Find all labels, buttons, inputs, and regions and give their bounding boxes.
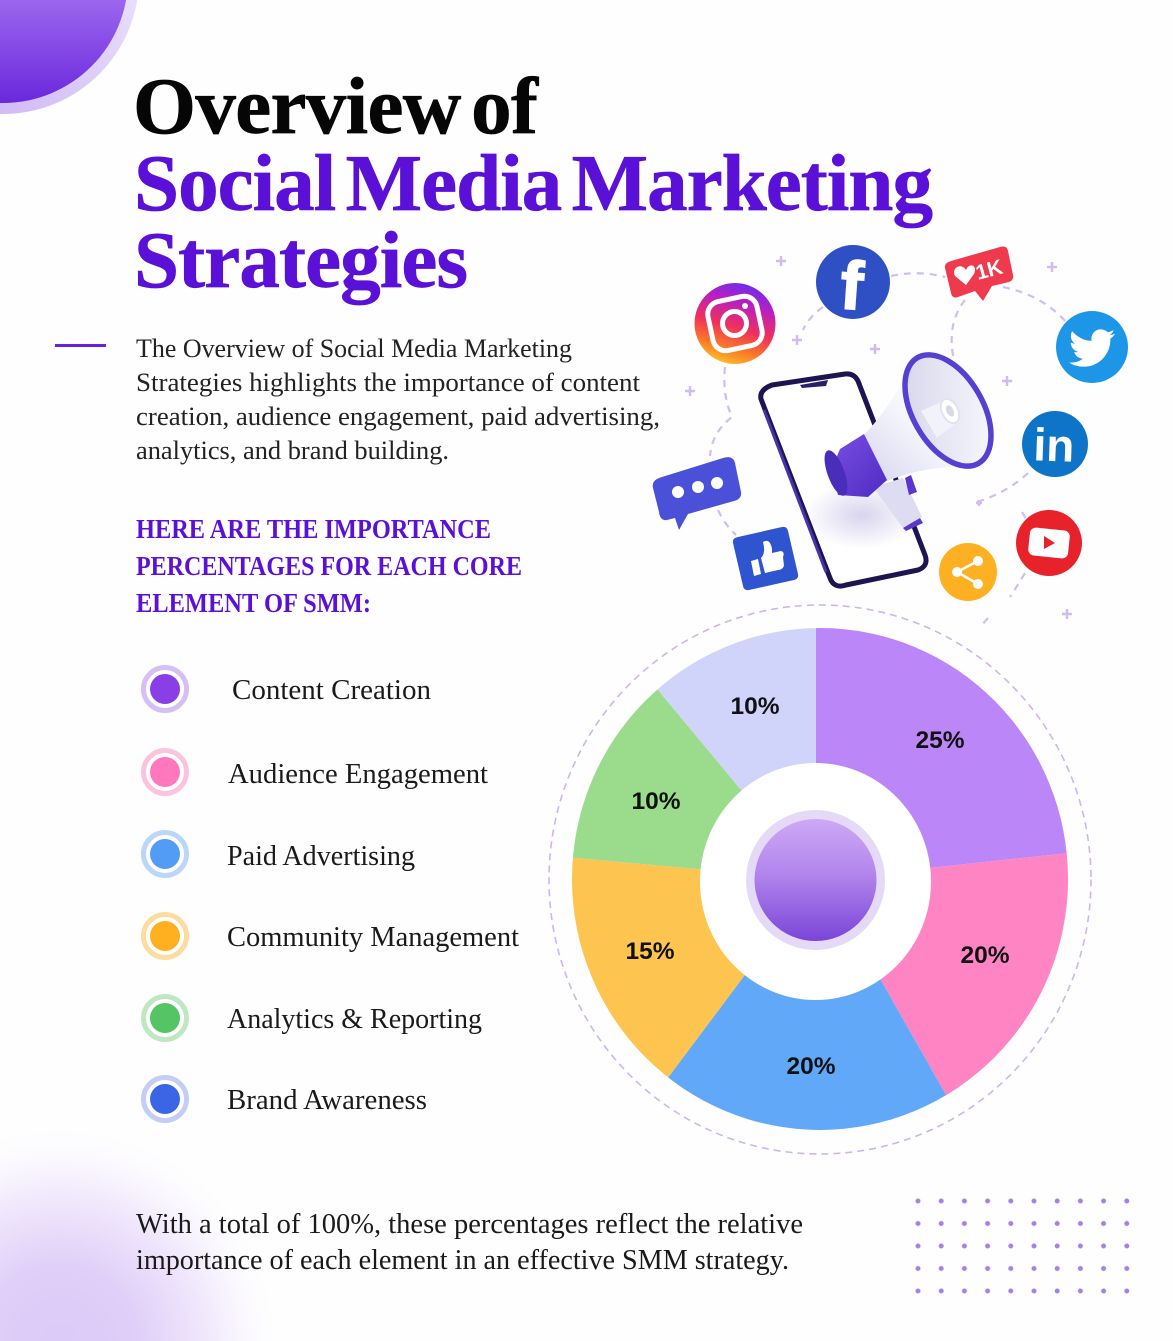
icon: 1K notification badge: 1K bbox=[973, 256, 1005, 285]
megaphone shadow bbox=[804, 481, 920, 549]
percentage labels: 15% bbox=[625, 938, 675, 965]
closing statement: importance of each element in an effective SMM strategy. bbox=[136, 1245, 789, 1276]
legend item: Content Creation: Content Creation bbox=[232, 675, 431, 706]
percentage labels: 25% bbox=[915, 727, 965, 754]
title: Overview of bbox=[133, 61, 539, 151]
legend item: Community Management: Community Management bbox=[227, 922, 519, 953]
intro paragraph bbox=[136, 334, 660, 465]
icon: instagram bbox=[694, 283, 776, 364]
accent line bbox=[55, 344, 106, 347]
subheading bbox=[136, 514, 522, 618]
percentage labels: 20% bbox=[960, 942, 1010, 969]
intro paragraph: creation, audience engagement, paid advertising, bbox=[136, 402, 660, 431]
icon: thumbs up bbox=[733, 527, 798, 590]
intro paragraph: Strategies highlights the importance of content bbox=[136, 368, 641, 397]
icon: linkedin bbox=[1022, 411, 1088, 477]
legend bbox=[144, 668, 519, 1120]
legend item: Paid Advertising: Paid Advertising bbox=[227, 841, 415, 872]
legend item: Paid Advertising bbox=[144, 832, 415, 876]
icon: 1K notification badge bbox=[945, 246, 1013, 301]
legend item: Audience Engagement bbox=[144, 750, 488, 794]
legend item: Audience Engagement: Audience Engagement bbox=[228, 759, 488, 790]
closing statement: With a total of 100%, these percentages reflect the relative bbox=[136, 1209, 803, 1240]
icon: megaphone bbox=[820, 340, 1009, 531]
donut chart bbox=[548, 604, 1092, 1155]
subheading: HERE ARE THE IMPORTANCE bbox=[136, 514, 491, 544]
legend item: Community Management bbox=[144, 914, 519, 958]
dashed connectors bbox=[710, 273, 1066, 627]
legend item: Content Creation bbox=[144, 668, 431, 710]
legend item: Brand Awareness bbox=[144, 1078, 427, 1120]
bottom-left corner glow bbox=[0, 1110, 290, 1341]
legend item: Analytics & Reporting: Analytics & Reporting bbox=[227, 1004, 482, 1035]
closing statement bbox=[136, 1209, 803, 1276]
icon: phone bbox=[761, 374, 926, 586]
subheading: PERCENTAGES FOR EACH CORE bbox=[136, 551, 522, 581]
subheading: ELEMENT OF SMM: bbox=[136, 588, 371, 618]
percentage labels: 10% bbox=[631, 788, 681, 815]
dot grid decoration bbox=[906, 1190, 1138, 1302]
icon: youtube bbox=[1016, 510, 1082, 576]
plus sparkles bbox=[685, 256, 1072, 619]
legend item: Analytics & Reporting bbox=[144, 996, 482, 1040]
dashed outer ring bbox=[549, 605, 1091, 1154]
title bbox=[133, 61, 933, 305]
intro paragraph: The Overview of Social Media Marketing bbox=[136, 334, 572, 363]
icon: twitter bbox=[1056, 311, 1128, 383]
icon: facebook: f bbox=[838, 247, 866, 325]
pie segments bbox=[572, 628, 1068, 1130]
donut hole bbox=[700, 763, 931, 1000]
icon: linkedin: in bbox=[1033, 418, 1075, 472]
legend item: Brand Awareness: Brand Awareness bbox=[227, 1085, 427, 1116]
title: Social Media Marketing bbox=[134, 138, 933, 228]
intro paragraph: analytics, and brand building. bbox=[136, 436, 449, 465]
icon: facebook bbox=[816, 245, 890, 325]
social media illustration bbox=[653, 245, 1128, 627]
title: Strategies bbox=[134, 215, 468, 305]
icon: chat bubble bbox=[653, 457, 741, 530]
percentage labels: 10% bbox=[730, 693, 780, 720]
percentage labels bbox=[625, 693, 1010, 1080]
centre ball bbox=[746, 810, 885, 950]
icon: share bbox=[939, 543, 997, 601]
top-left circle decoration bbox=[0, 0, 139, 114]
percentage labels: 20% bbox=[786, 1053, 836, 1080]
